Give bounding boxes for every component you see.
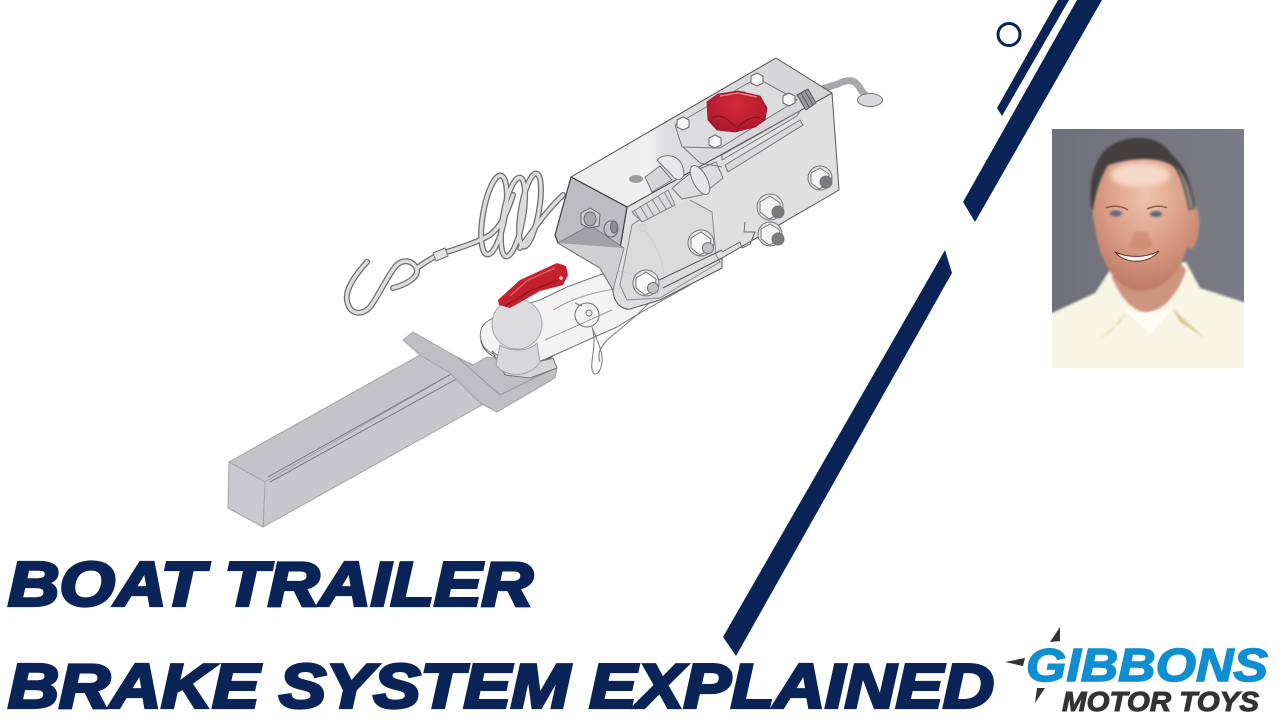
housing top face: [571, 58, 832, 207]
hair: [1090, 138, 1195, 210]
oval hole: [629, 175, 643, 183]
gray temple: [1176, 166, 1194, 210]
title: [8, 550, 994, 720]
undershirt and collar: [1124, 306, 1176, 334]
safety pin ring and breakaway lanyard: [575, 224, 664, 374]
decorative navy stripes and circle: [723, 0, 1102, 656]
title: BRAKE SYSTEM EXPLAINED: [8, 652, 994, 720]
reservoir bolts: [677, 73, 795, 148]
shirt: [1052, 260, 1244, 368]
red coupler latch: [498, 263, 568, 308]
neck: [1111, 263, 1187, 313]
mounting bracket: [620, 200, 720, 300]
illustration: boat trailer actuator and hitch: [228, 58, 882, 527]
nose: [1129, 232, 1152, 249]
coupler body: [480, 270, 690, 378]
housing side face: [613, 93, 839, 309]
actuator housing: [555, 58, 882, 309]
photo: smiling man in cream shirt: [1052, 129, 1244, 368]
red reservoir cap: [707, 91, 767, 132]
front nuts: [581, 208, 618, 237]
eyes: [1110, 210, 1122, 216]
logo: Gibbons Motor Toys: MOTOR TOYS: [1062, 686, 1259, 717]
housing front face: [555, 177, 627, 290]
side nuts: [633, 166, 832, 296]
smile: [1115, 251, 1159, 261]
hitch bar: [228, 332, 557, 527]
title: BOAT TRAILER: [8, 550, 533, 620]
head: [1092, 155, 1199, 291]
logo: Gibbons Motor Toys: GIBBONS: [1026, 639, 1268, 691]
safety cable and S hook: [347, 172, 563, 313]
logo: Gibbons Motor Toys: [1005, 627, 1268, 717]
forehead highlight: [1110, 163, 1170, 187]
master cylinder: [645, 78, 803, 199]
spring: [632, 190, 675, 222]
threaded fitting: [797, 89, 816, 110]
brake line tube: [812, 81, 882, 106]
